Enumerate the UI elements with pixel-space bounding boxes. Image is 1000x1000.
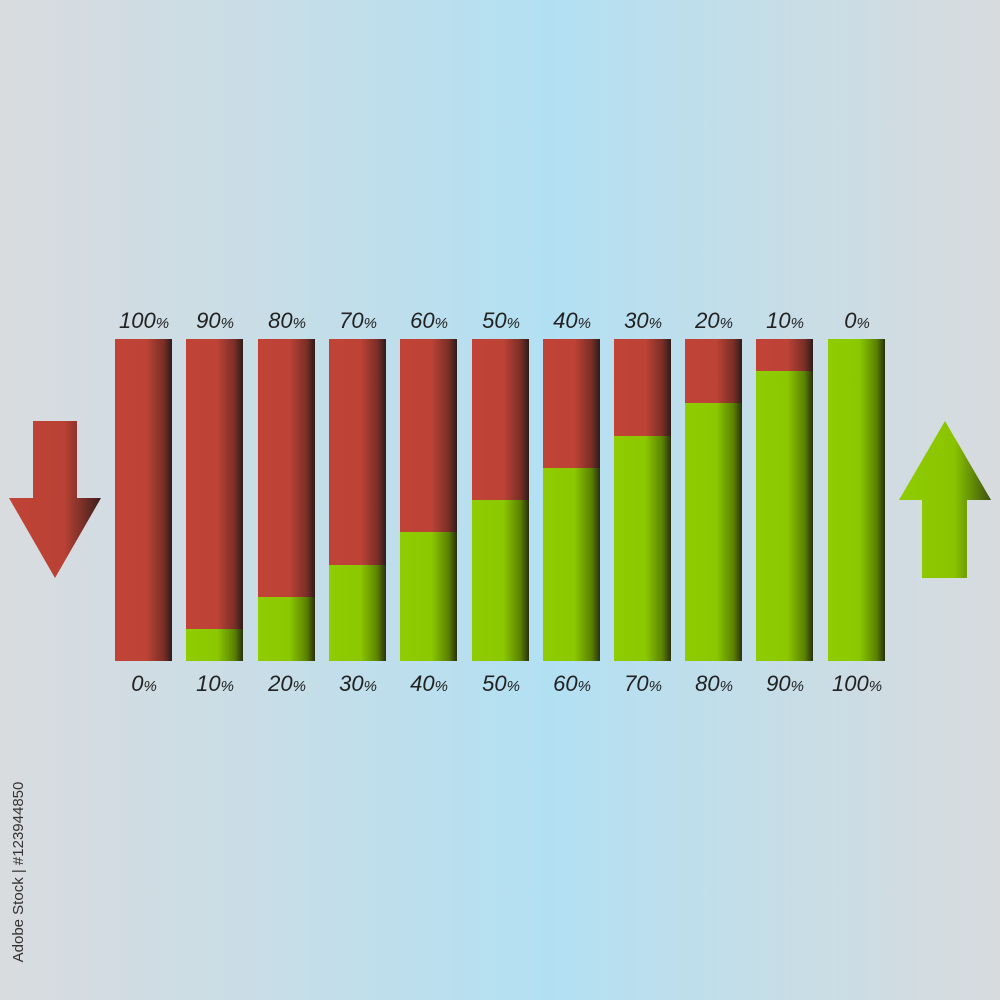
- watermark id text: Adobe Stock | #123944850: [10, 782, 27, 962]
- bar 20: [258, 339, 315, 661]
- bottom labels: 30%: [339, 671, 377, 696]
- bar 100: [828, 339, 885, 661]
- bottom labels: 60%: [553, 671, 591, 696]
- bar 50: [472, 339, 529, 661]
- bar 90: [756, 339, 813, 661]
- bottom labels: [131, 671, 882, 696]
- bottom labels: 10%: [196, 671, 234, 696]
- top labels: 80%: [268, 308, 306, 333]
- bottom labels: 50%: [482, 671, 520, 696]
- bottom labels: 40%: [410, 671, 448, 696]
- bottom labels: 20%: [268, 671, 306, 696]
- bottom labels: 90%: [766, 671, 804, 696]
- top labels: 60%: [410, 308, 448, 333]
- top labels: 90%: [196, 308, 234, 333]
- bottom labels: 70%: [624, 671, 662, 696]
- bar 0: [115, 339, 172, 661]
- top labels: 100%: [119, 308, 169, 333]
- bar 60: [543, 339, 600, 661]
- bottom labels: 100%: [832, 671, 882, 696]
- top labels: [119, 308, 870, 333]
- top labels: 70%: [339, 308, 377, 333]
- top labels: 10%: [766, 308, 804, 333]
- bar 40: [400, 339, 457, 661]
- bar 10: [186, 339, 243, 661]
- top labels: 50%: [482, 308, 520, 333]
- bar 30: [329, 339, 386, 661]
- bar 80: [685, 339, 742, 661]
- icon: down arrow red: [9, 421, 101, 578]
- bar 70: [614, 339, 671, 661]
- top labels: 20%: [695, 308, 733, 333]
- top labels: 0%: [844, 308, 870, 333]
- bottom labels: 0%: [131, 671, 157, 696]
- top labels: 40%: [553, 308, 591, 333]
- top labels: 30%: [624, 308, 662, 333]
- icon: up arrow green: [899, 421, 991, 578]
- bottom labels: 80%: [695, 671, 733, 696]
